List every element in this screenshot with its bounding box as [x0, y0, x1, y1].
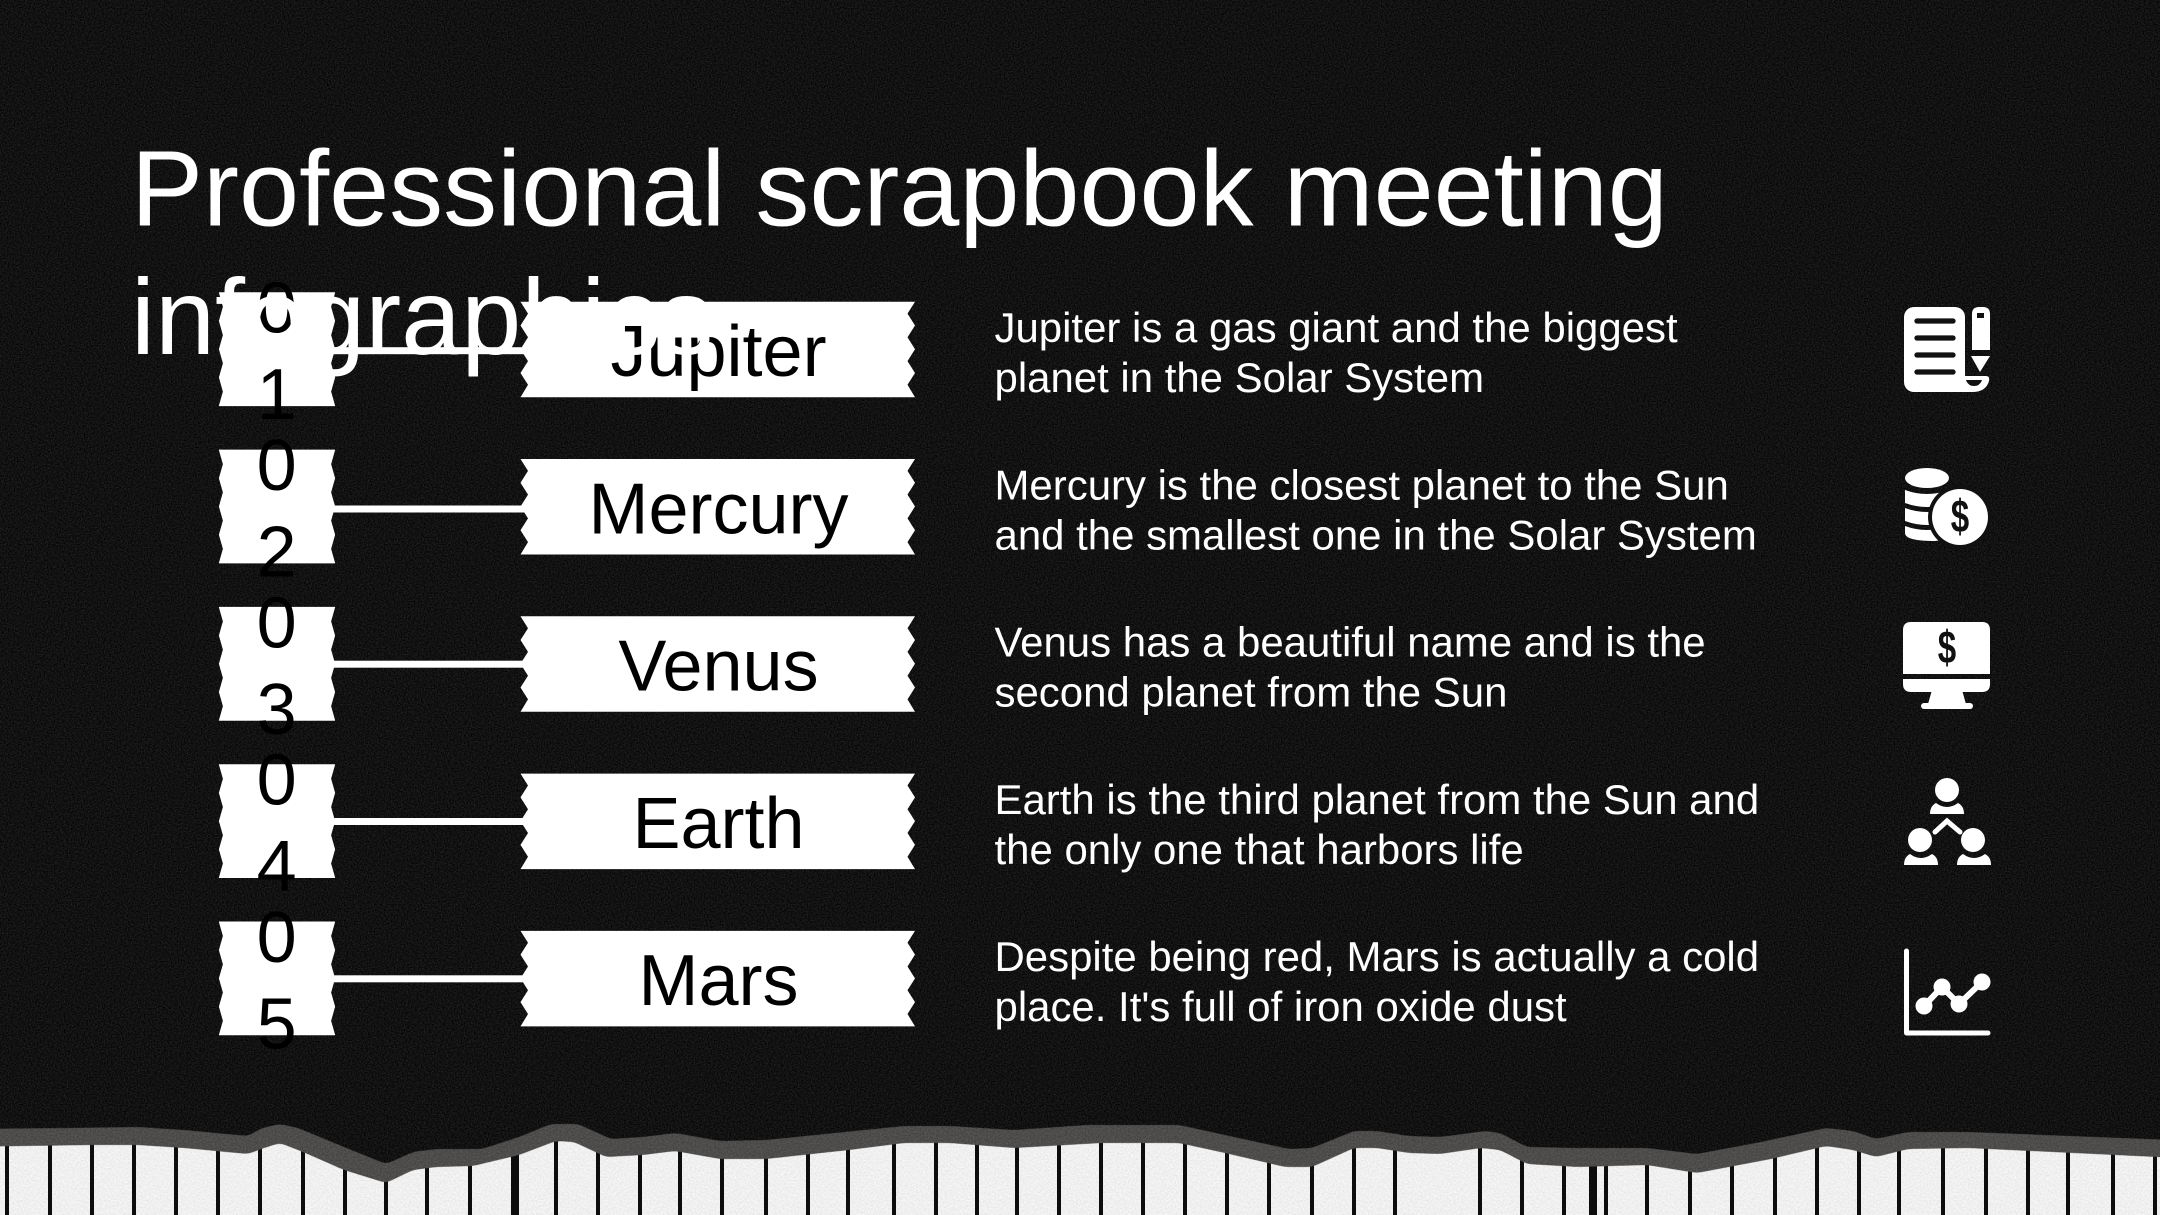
tape label Mercury — [520, 459, 915, 554]
icon: document and pencil — [1904, 307, 1990, 392]
number tag 05: 0 — [257, 898, 297, 978]
number tag 02 — [219, 426, 335, 592]
tape label Earth — [520, 774, 915, 869]
tape label Jupiter — [520, 302, 915, 397]
tape label Earth: Earth — [632, 784, 805, 864]
row 4: Earth — [219, 741, 915, 907]
description: Venus: Venus has a beautiful name and is the — [994, 619, 1706, 666]
description: Jupiter: planet in the Solar System — [994, 354, 1484, 401]
number tag 04 — [219, 741, 335, 907]
icon: coins and dollar — [1905, 468, 1992, 549]
tape label Venus: Venus — [618, 627, 819, 707]
tape label Mars — [520, 931, 915, 1026]
number tag 05 — [219, 898, 335, 1064]
number tag 03 — [219, 583, 335, 750]
row 3: Venus — [219, 583, 915, 750]
row 1: Jupiter — [219, 269, 915, 435]
tape label Jupiter: Jupiter — [610, 312, 827, 392]
icon: line chart — [1906, 951, 1990, 1033]
tape label Mercury: Mercury — [588, 469, 849, 549]
number tag 02: 2 — [257, 512, 297, 592]
number tag 01 — [219, 269, 335, 435]
number tag 03: 3 — [257, 670, 297, 750]
number tag 01: 1 — [257, 355, 297, 435]
description: Mercury: and the smallest one in the Solar System — [994, 511, 1757, 558]
icon: monitor with dollar: $ — [1938, 623, 1956, 673]
row 2: Mercury — [219, 426, 915, 592]
icon: coins and dollar: $ — [1951, 492, 1969, 542]
icon: monitor with dollar — [1903, 622, 1990, 709]
description: Mercury: Mercury is the closest planet to the Sun — [994, 461, 1729, 508]
tape label Mars: Mars — [638, 941, 798, 1021]
number tag 04: 4 — [257, 827, 297, 907]
number tag 04: 0 — [257, 741, 297, 821]
torn paper strip at the bottom — [0, 1120, 2160, 1215]
row 5: Mars — [219, 898, 915, 1064]
title: Professional scrapbook meeting — [131, 128, 1668, 248]
number tag 03: 0 — [257, 583, 297, 663]
description: Jupiter: Jupiter is a gas giant and the biggest — [994, 304, 1678, 351]
description: Earth: the only one that harbors life — [994, 826, 1524, 873]
description: Earth: Earth is the third planet from the Sun and — [994, 776, 1759, 823]
title: infographics — [131, 256, 713, 377]
number tag 01: 0 — [257, 269, 297, 349]
description: Mars: Despite being red, Mars is actually a cold — [994, 933, 1759, 980]
description: Venus: second planet from the Sun — [994, 669, 1507, 716]
icon: team of three people — [1904, 778, 1991, 865]
number tag 02: 0 — [257, 426, 297, 506]
description: Mars: place. It's full of iron oxide dust — [994, 983, 1567, 1030]
tape label Venus — [520, 616, 915, 712]
number tag 05: 5 — [257, 984, 297, 1064]
